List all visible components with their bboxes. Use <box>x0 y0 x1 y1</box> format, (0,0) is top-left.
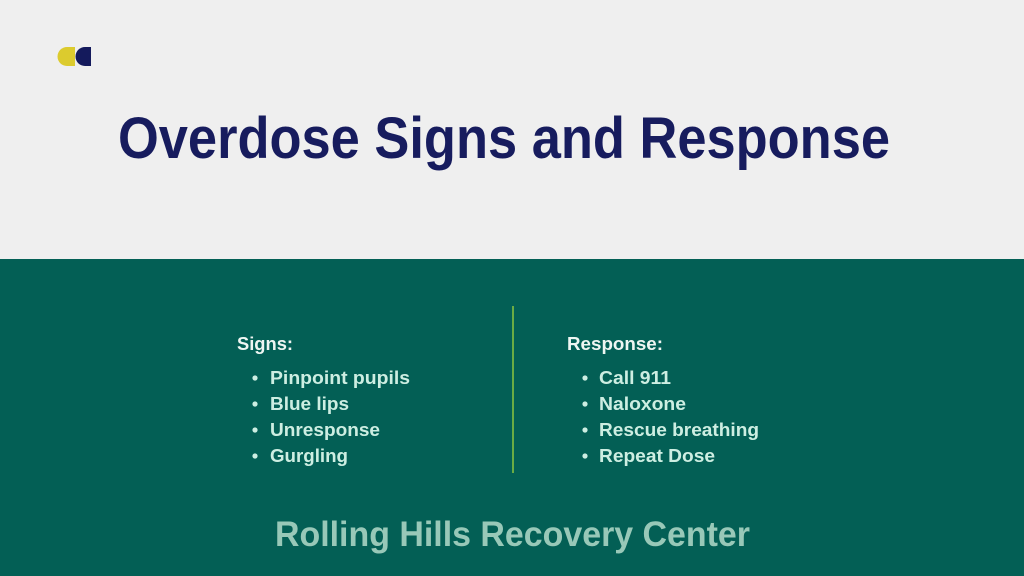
heading: signs: Signs: <box>237 334 293 354</box>
list: signs <box>252 368 410 466</box>
list: response <box>582 368 759 466</box>
list: signs: Unresponse <box>270 420 380 440</box>
list: response: Naloxone <box>599 394 686 414</box>
footer: Rolling Hills Recovery Center <box>275 515 750 554</box>
heading: response: Response: <box>567 334 663 354</box>
list: signs: Blue lips <box>270 394 349 414</box>
panel: green band <box>0 259 1024 576</box>
list: response: Rescue breathing <box>599 420 759 440</box>
list: signs: Pinpoint pupils <box>270 368 410 388</box>
panel: response <box>567 334 759 466</box>
divider <box>512 306 514 473</box>
title: Overdose Signs and Response <box>118 106 890 171</box>
list: response: Repeat Dose <box>599 446 715 466</box>
list: response: Call 911 <box>599 368 671 388</box>
panel: signs <box>237 334 410 466</box>
icon: logo half circles <box>58 47 91 66</box>
list: signs: Gurgling <box>270 446 348 466</box>
